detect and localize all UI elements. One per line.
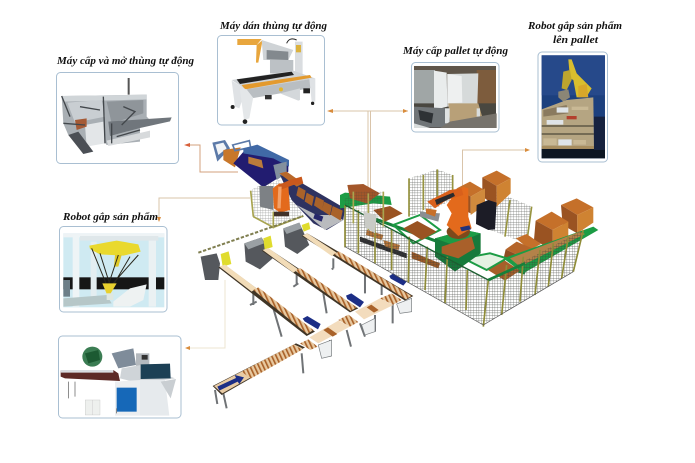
infeed transfer fence <box>343 192 383 233</box>
conveyor line 2 <box>262 248 358 312</box>
pallet dispenser photo <box>414 66 497 128</box>
black pallet magazine <box>476 200 497 230</box>
panel: pallet dispenser <box>412 62 499 132</box>
title: palletizing robot: Robot gắp sản phẩm <box>527 20 622 32</box>
picking conveyors <box>213 233 413 408</box>
panel frame <box>56 72 178 164</box>
conveyor line 3 <box>302 233 413 301</box>
panel: flow wrapping machine <box>58 336 181 418</box>
green conveyors <box>340 184 598 281</box>
panel frame <box>218 36 324 125</box>
delta robot photo <box>63 233 164 307</box>
back fence <box>409 169 532 243</box>
panel: delta picking robot <box>60 226 167 312</box>
carton erector and robot cell <box>198 140 345 280</box>
orange carton robot <box>273 177 303 216</box>
machine photo <box>231 39 315 124</box>
title: delta picking robot: Robot gắp sản phẩm <box>62 211 158 223</box>
robot fence cell <box>250 180 303 228</box>
conveyor line 1 <box>218 265 315 336</box>
production line drawing <box>198 140 598 408</box>
panel frame <box>538 52 608 162</box>
perimeter fence <box>345 205 583 327</box>
connector lines <box>159 111 528 348</box>
title: carton erecting machine: Máy cấp và mở thùng tự động <box>56 55 194 67</box>
flow direction arrows <box>217 273 407 391</box>
cartons on stands <box>457 171 593 267</box>
panel: carton taping machine <box>218 36 324 125</box>
title: carton taping machine: Máy dán thùng tự động <box>219 20 327 32</box>
panel: palletizing robot <box>538 52 608 162</box>
palletizing robot cell <box>420 187 481 272</box>
palletizing robot photo <box>542 55 605 158</box>
main collecting conveyor <box>213 293 412 395</box>
conveyor legs <box>215 258 410 408</box>
palletizing cell <box>340 169 598 327</box>
panel frame <box>58 336 181 418</box>
box erector machine <box>212 140 289 187</box>
feeder rail <box>198 216 303 253</box>
panel frame <box>60 226 167 312</box>
flow wrapper photo <box>61 347 176 416</box>
panel: carton erecting machine <box>56 72 178 164</box>
arrow heads <box>157 109 530 350</box>
machine photo <box>62 78 172 154</box>
title: palletizing robot second line: lên pallet <box>553 34 599 46</box>
infeed conveyor with cartons <box>279 172 345 230</box>
panel frame <box>412 62 499 132</box>
yellow robots and grey packers <box>201 222 310 280</box>
title: pallet dispenser: Máy cấp pallet tự động <box>402 45 508 57</box>
